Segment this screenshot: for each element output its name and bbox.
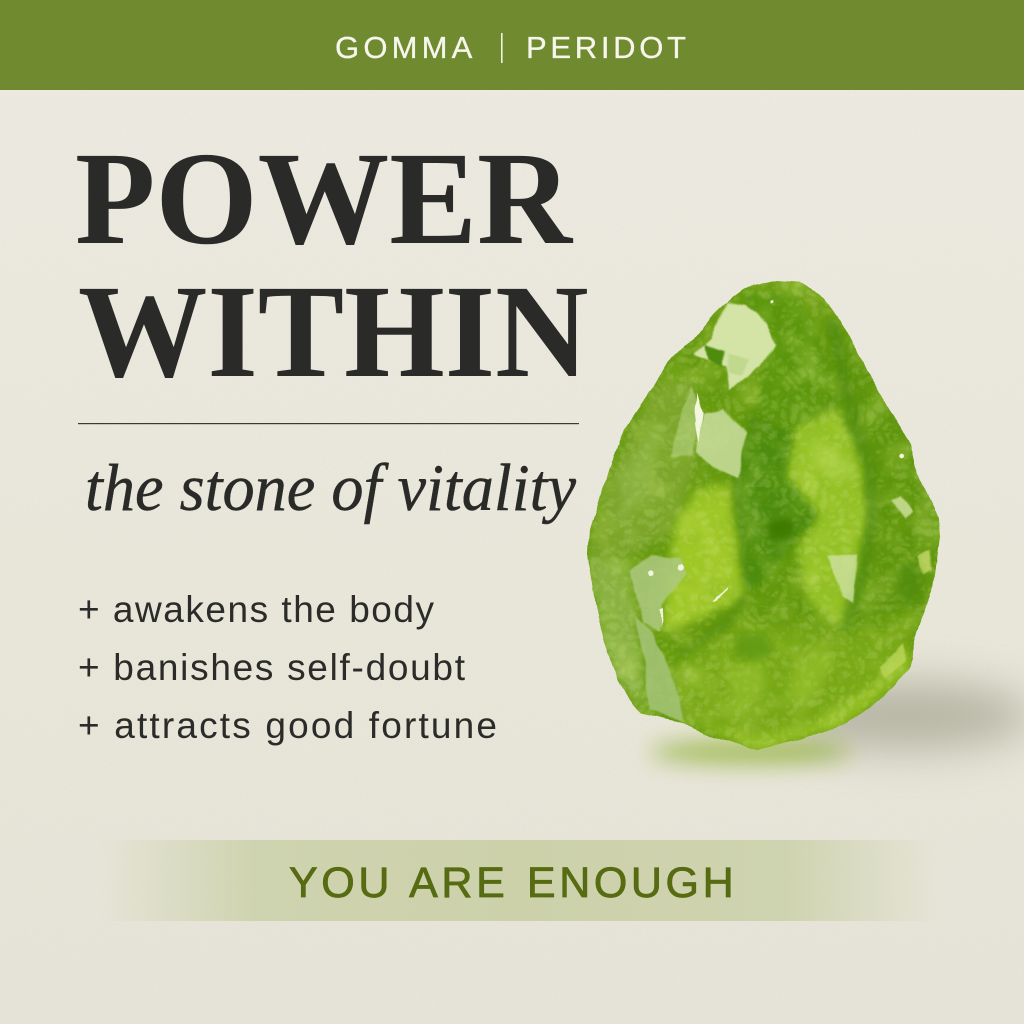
lighter left flank	[590, 380, 700, 557]
specular marks	[649, 301, 903, 626]
header separator	[501, 33, 503, 63]
header text: brand: GOMMA	[335, 30, 477, 65]
lower left edge	[590, 557, 647, 710]
darker upper ridge	[737, 290, 840, 427]
pale lower-left chip	[630, 555, 687, 630]
lower bright rim	[693, 647, 910, 750]
pale lower strip	[635, 617, 683, 722]
title: WITHIN	[78, 258, 589, 405]
dark pit	[764, 516, 796, 541]
gem shadow	[650, 682, 1024, 765]
divider	[78, 423, 579, 424]
mottled texture	[580, 270, 953, 757]
benefits list: + awakens the body	[78, 589, 434, 630]
bottom banner	[100, 840, 940, 921]
left streak highlights	[670, 387, 700, 457]
lower body	[673, 620, 913, 750]
top highlight facet	[693, 302, 775, 391]
benefits list: + banishes self-doubt	[78, 647, 466, 688]
subtitle: the stone of vitality	[85, 451, 576, 525]
central bright facet	[780, 407, 868, 632]
central dark hollow	[735, 417, 820, 590]
title: POWER	[75, 124, 573, 272]
lower left bright facet	[663, 483, 750, 633]
mid highlight	[695, 410, 747, 478]
header text: stone: PERIDOT	[526, 30, 690, 65]
soft dark ridges	[673, 320, 873, 660]
banner text: YOU ARE ENOUGH	[289, 859, 737, 907]
header bar	[0, 0, 1024, 90]
right flank	[820, 310, 940, 633]
benefits list	[78, 589, 497, 746]
benefits list: + attracts good fortune	[78, 705, 497, 746]
pale facet flecks	[827, 553, 857, 603]
icon: peridot gemstone	[580, 270, 953, 757]
title	[75, 124, 589, 405]
